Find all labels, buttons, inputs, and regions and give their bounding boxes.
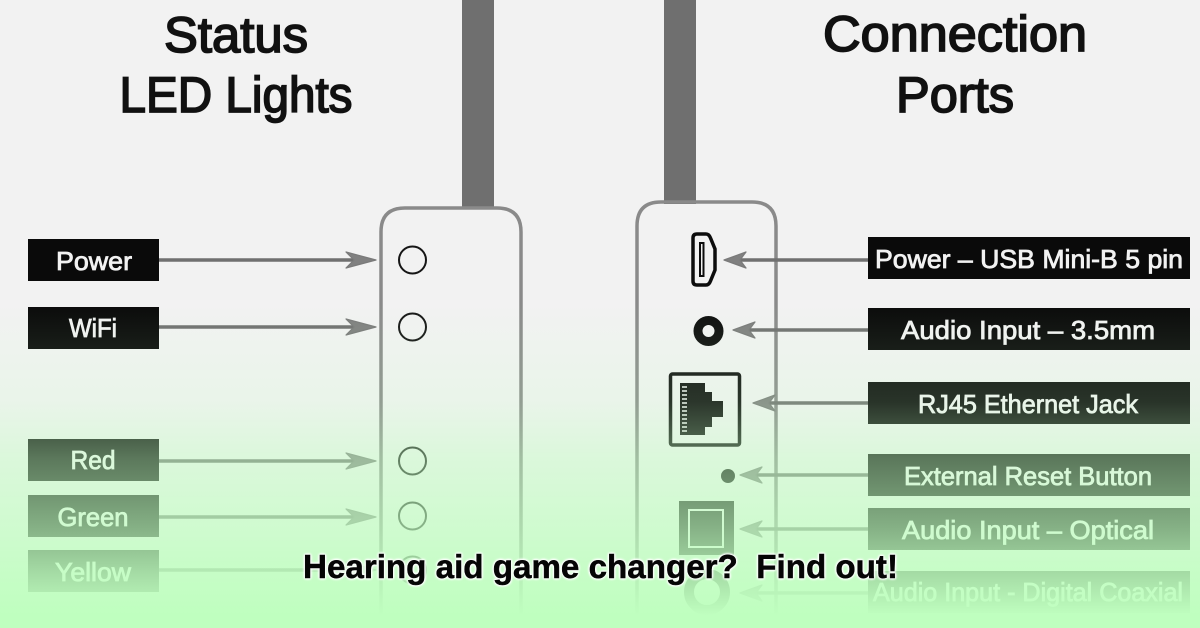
icon: optical audio port: [679, 501, 734, 555]
label: Power USB Mini-B: Power – USB Mini-B 5 pin: [875, 244, 1183, 274]
heading: Connection Ports: Ports: [896, 67, 1014, 123]
label: Green: Green: [58, 502, 128, 532]
label: Audio Input Digital Coaxial: Audio Input - Digital Coaxial: [873, 577, 1183, 607]
arrow: audio input: [733, 322, 868, 338]
LED: Yellow: [399, 556, 426, 584]
cable: right device: [664, 0, 696, 204]
label: Audio Input Optical: [868, 508, 1190, 550]
label: Power: Power: [56, 246, 132, 276]
label: WiFi: WiFi: [69, 313, 117, 343]
heading: Status LED Lights: LED Lights: [120, 67, 352, 123]
arrow: optical: [740, 521, 868, 537]
arrow: reset: [740, 467, 868, 483]
icon: USB Mini-B port: [693, 234, 715, 285]
arrow: coaxial: [740, 585, 868, 601]
arrow: RJ45: [753, 395, 868, 411]
arrow: Yellow: [159, 562, 376, 578]
label: Power USB Mini-B: [868, 237, 1190, 279]
label: External Reset Button: External Reset Button: [904, 461, 1152, 491]
LED: Power: [399, 246, 426, 274]
label: Audio Input 3.5mm: [868, 308, 1190, 350]
label: Audio Input 3.5mm: Audio Input – 3.5mm: [901, 315, 1155, 345]
headline caption: Hearing aid game changer? Find out!: [303, 548, 898, 585]
label: Audio Input Optical: Audio Input – Optical: [902, 515, 1154, 545]
device outline: status LED side: [381, 208, 521, 628]
arrow: Power: [159, 252, 376, 268]
heading: Status LED Lights: [120, 7, 352, 123]
icon: RJ45 Ethernet jack: [670, 374, 740, 445]
label: Power: [28, 239, 159, 281]
label: RJ45 Ethernet Jack: [868, 382, 1190, 424]
arrow: WiFi: [159, 319, 376, 335]
LED: WiFi: [399, 314, 426, 340]
heading: Status LED Lights: Status: [164, 7, 308, 63]
arrow: Red: [159, 453, 376, 469]
label: WiFi: [28, 307, 159, 349]
label: Red: Red: [70, 445, 116, 475]
LED: Red: [399, 448, 426, 474]
label: External Reset Button: [868, 454, 1190, 496]
label: RJ45 Ethernet Jack: RJ45 Ethernet Jack: [918, 389, 1139, 419]
icon: digital coaxial port: [689, 574, 725, 610]
label: Green: [28, 495, 159, 537]
heading: Connection Ports: Connection: [823, 6, 1087, 62]
label: Audio Input Digital Coaxial: [868, 571, 1190, 613]
label: Yellow: [28, 550, 159, 592]
device outline: connection ports side: [637, 202, 776, 628]
icon: reset button: [721, 469, 735, 483]
icon: 3.5mm audio jack: [698, 320, 719, 342]
arrow: Green: [159, 509, 376, 525]
heading: Connection Ports: [823, 6, 1087, 123]
cable: left device: [462, 0, 494, 208]
label: Yellow: Yellow: [55, 557, 131, 587]
arrow: USB power: [724, 252, 868, 268]
label: Red: [28, 439, 159, 481]
LED: Green: [399, 502, 426, 530]
